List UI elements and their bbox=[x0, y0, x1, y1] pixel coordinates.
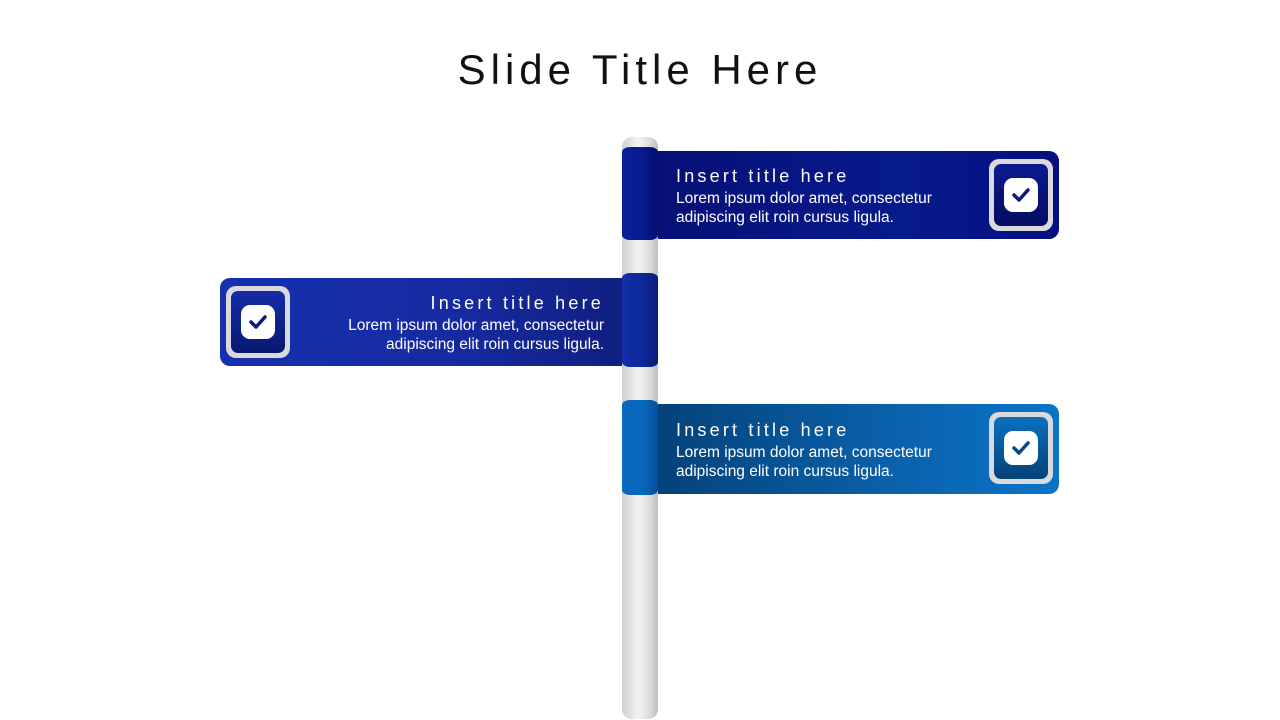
panel: sign 1 bbox=[658, 151, 1059, 239]
panel: sign 3 bbox=[658, 404, 1059, 494]
pole band 1 bbox=[622, 147, 658, 240]
sign 1 title: Insert title here bbox=[676, 166, 849, 186]
sign 2 body bbox=[348, 317, 604, 353]
sign 2 body: adipiscing elit roin cursus ligula. bbox=[386, 336, 604, 353]
sign 1 body bbox=[676, 190, 932, 226]
sign 1 body: adipiscing elit roin cursus ligula. bbox=[676, 209, 894, 226]
sign 1 body: Lorem ipsum dolor amet, consectetur bbox=[676, 190, 932, 207]
sign 3 title: Insert title here bbox=[676, 420, 849, 440]
title: Slide Title Here bbox=[458, 46, 822, 93]
sign 2 title: Insert title here bbox=[431, 293, 604, 313]
sign 2 body: Lorem ipsum dolor amet, consectetur bbox=[348, 317, 604, 334]
icon: check 1 bbox=[989, 159, 1053, 231]
icon: check 3 bbox=[989, 412, 1053, 484]
icon: check 2 bbox=[226, 286, 290, 358]
sign 3 body bbox=[676, 444, 932, 480]
signpost pole bbox=[622, 137, 658, 719]
pole band 3 bbox=[622, 400, 658, 495]
sign 3 body: adipiscing elit roin cursus ligula. bbox=[676, 463, 894, 480]
pole band 2 bbox=[622, 273, 658, 367]
panel: sign 2 bbox=[220, 278, 622, 366]
sign 3 body: Lorem ipsum dolor amet, consectetur bbox=[676, 444, 932, 461]
